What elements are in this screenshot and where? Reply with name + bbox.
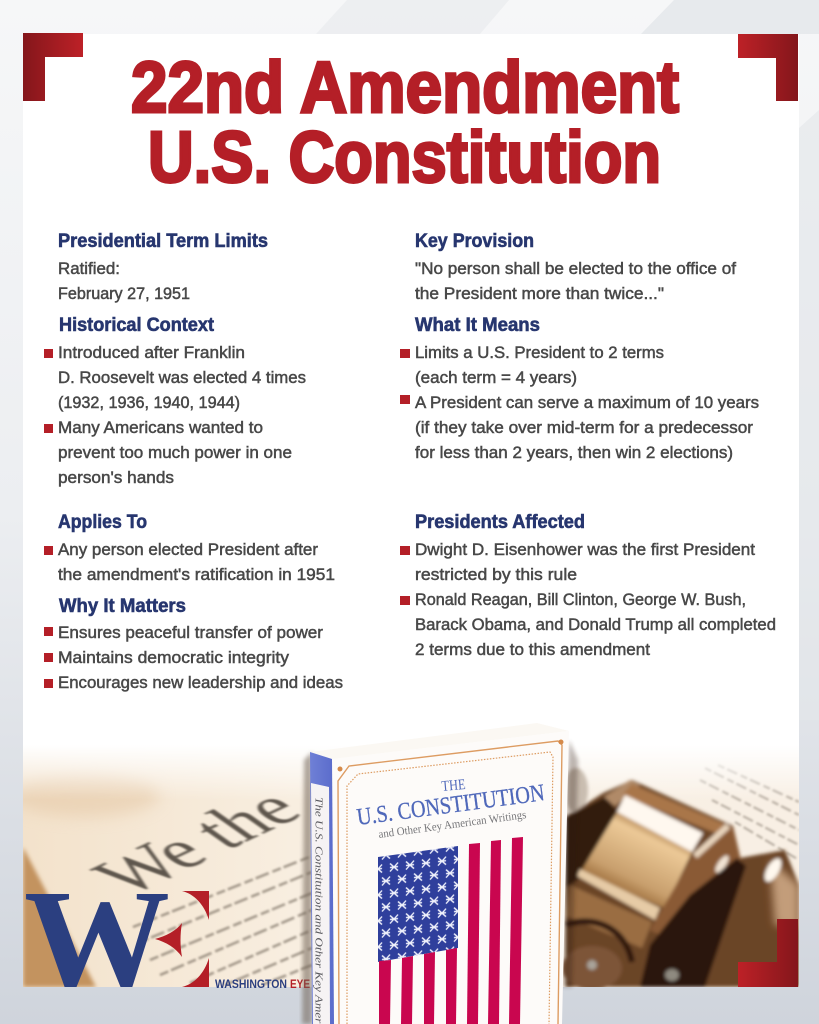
parchment — [23, 745, 799, 987]
flag stars — [378, 840, 458, 965]
gavel ring highlight — [713, 854, 731, 874]
cover title: THE — [441, 777, 466, 795]
gavel dark face — [640, 858, 746, 987]
gavel left dark — [566, 797, 618, 888]
panel: what it means: A President can serve a maximum of 10 years — [415, 393, 759, 412]
logo wordmark: EYE — [290, 977, 310, 991]
corner bracket: top right — [738, 34, 798, 101]
spine label — [311, 783, 330, 1024]
panel: why it matters — [44, 595, 343, 692]
panel: what it means: for less than 2 years, then win 2 elections) — [415, 443, 733, 462]
gavel lower band — [577, 869, 660, 920]
blurred document lines upper right — [700, 765, 799, 860]
panel: historical context: person's hands — [58, 468, 174, 487]
panel: historical context: prevent too much power in one — [58, 443, 292, 462]
panel: presidents affected: Barack Obama, and Donald Trump all completed — [415, 615, 776, 634]
panel: why it matters: Encourages new leadership and ideas — [58, 673, 343, 692]
panel: presidents affected: Dwight D. Eisenhower was the first President — [415, 540, 755, 559]
book shadow — [302, 752, 312, 1024]
gavel top edge — [623, 784, 726, 834]
panel: key provision — [415, 230, 736, 303]
logo E mark — [155, 891, 209, 987]
gavel grey reflection — [564, 768, 588, 812]
corner bracket: top left — [23, 33, 83, 101]
gavel gold barrel — [580, 812, 692, 908]
logo — [26, 891, 310, 988]
panel: presidents affected: Presidents Affected — [415, 511, 585, 533]
gavel base band — [566, 885, 652, 948]
panel: what it means: (if they take over mid-term for a predecessor — [415, 418, 753, 437]
book right shadow — [563, 740, 578, 987]
gavel gloss — [617, 795, 703, 852]
gavel lower arc — [566, 921, 632, 962]
panel: what it means: (each term = 4 years) — [415, 368, 577, 387]
book — [302, 723, 578, 1024]
gavel knob highlight — [761, 856, 785, 884]
photo strip: constitution and gavel — [10, 745, 799, 990]
panel: historical context — [44, 314, 306, 487]
parchment warm patch — [10, 773, 160, 817]
title: U.S. Constitution — [148, 118, 661, 198]
cover title: U.S. CONSTITUTION — [355, 780, 546, 831]
gavel ring rim — [695, 826, 728, 856]
gavel lower collar — [562, 946, 622, 990]
panel: applies to — [44, 511, 335, 584]
panel: presidents affected: restricted by this rule — [415, 565, 577, 584]
parchment edge shadow — [23, 847, 96, 987]
gavel collar — [604, 780, 640, 806]
panel: why it matters: Maintains democratic integrity — [58, 648, 290, 667]
panel: historical context: Historical Context — [59, 314, 214, 336]
panel: presidential term limits: Presidential Term Limits — [58, 230, 268, 252]
panel: why it matters: Ensures peaceful transfer of power — [58, 623, 323, 642]
panel: historical context: D. Roosevelt was elected 4 times — [58, 368, 306, 387]
panel: key provision: Key Provision — [415, 230, 534, 252]
panel: key provision: the President more than twice..." — [415, 284, 664, 303]
gavel lower glint — [587, 960, 597, 970]
panel: presidents affected: Ronald Reagan, Bill Clinton, George W. Bush, — [415, 590, 746, 609]
title: 22nd Amendment — [131, 48, 679, 128]
gavel wood silhouette — [566, 780, 799, 987]
flag stripes — [379, 837, 523, 1024]
flag — [378, 837, 523, 1024]
panel: historical context: (1932, 1936, 1940, 1944) — [58, 393, 240, 412]
panel: what it means — [400, 314, 759, 462]
cover ornamental border — [338, 740, 564, 1024]
panel: what it means: Limits a U.S. President to 2 terms — [415, 343, 664, 362]
panel: applies to: Applies To — [58, 511, 147, 533]
panel: historical context: Introduced after Franklin — [58, 343, 245, 362]
panel: why it matters: Why It Matters — [59, 595, 186, 617]
panel: historical context: Many Americans wanted to — [58, 418, 263, 437]
blurred document lines — [133, 856, 312, 985]
panel: presidents affected — [400, 511, 776, 659]
panel: key provision: "No person shall be elected to the office of — [415, 259, 736, 278]
title — [131, 48, 679, 198]
logo wordmark: WASHINGTON — [215, 977, 287, 991]
gavel ring — [650, 828, 742, 937]
panel: applies to: Any person elected President after — [58, 540, 318, 559]
panel: what it means: What It Means — [415, 314, 540, 336]
panel: presidential term limits: Ratified: — [58, 259, 120, 278]
book top pages — [310, 723, 569, 759]
corner bracket: bottom right — [738, 919, 798, 987]
gavel glint — [665, 969, 679, 981]
panel: presidential term limits — [58, 230, 268, 303]
gavel — [562, 768, 799, 990]
fade to white — [23, 745, 799, 794]
spine title: The U.S. Constitution and Other Key Ameri — [312, 797, 324, 1024]
logo W: W — [24, 861, 170, 1021]
panel: presidents affected: 2 terms due to this amendment — [415, 640, 650, 659]
panel: presidential term limits: February 27, 1951 — [58, 284, 190, 303]
cover title: and Other Key American Writings — [378, 809, 528, 841]
gavel right tan — [770, 860, 799, 928]
flag canton — [378, 846, 458, 962]
book cover — [332, 731, 569, 1024]
panel: applies to: the amendment's ratification in 1951 — [58, 565, 335, 584]
handwritten words We the: We the — [76, 778, 318, 906]
book spine — [310, 752, 334, 1024]
